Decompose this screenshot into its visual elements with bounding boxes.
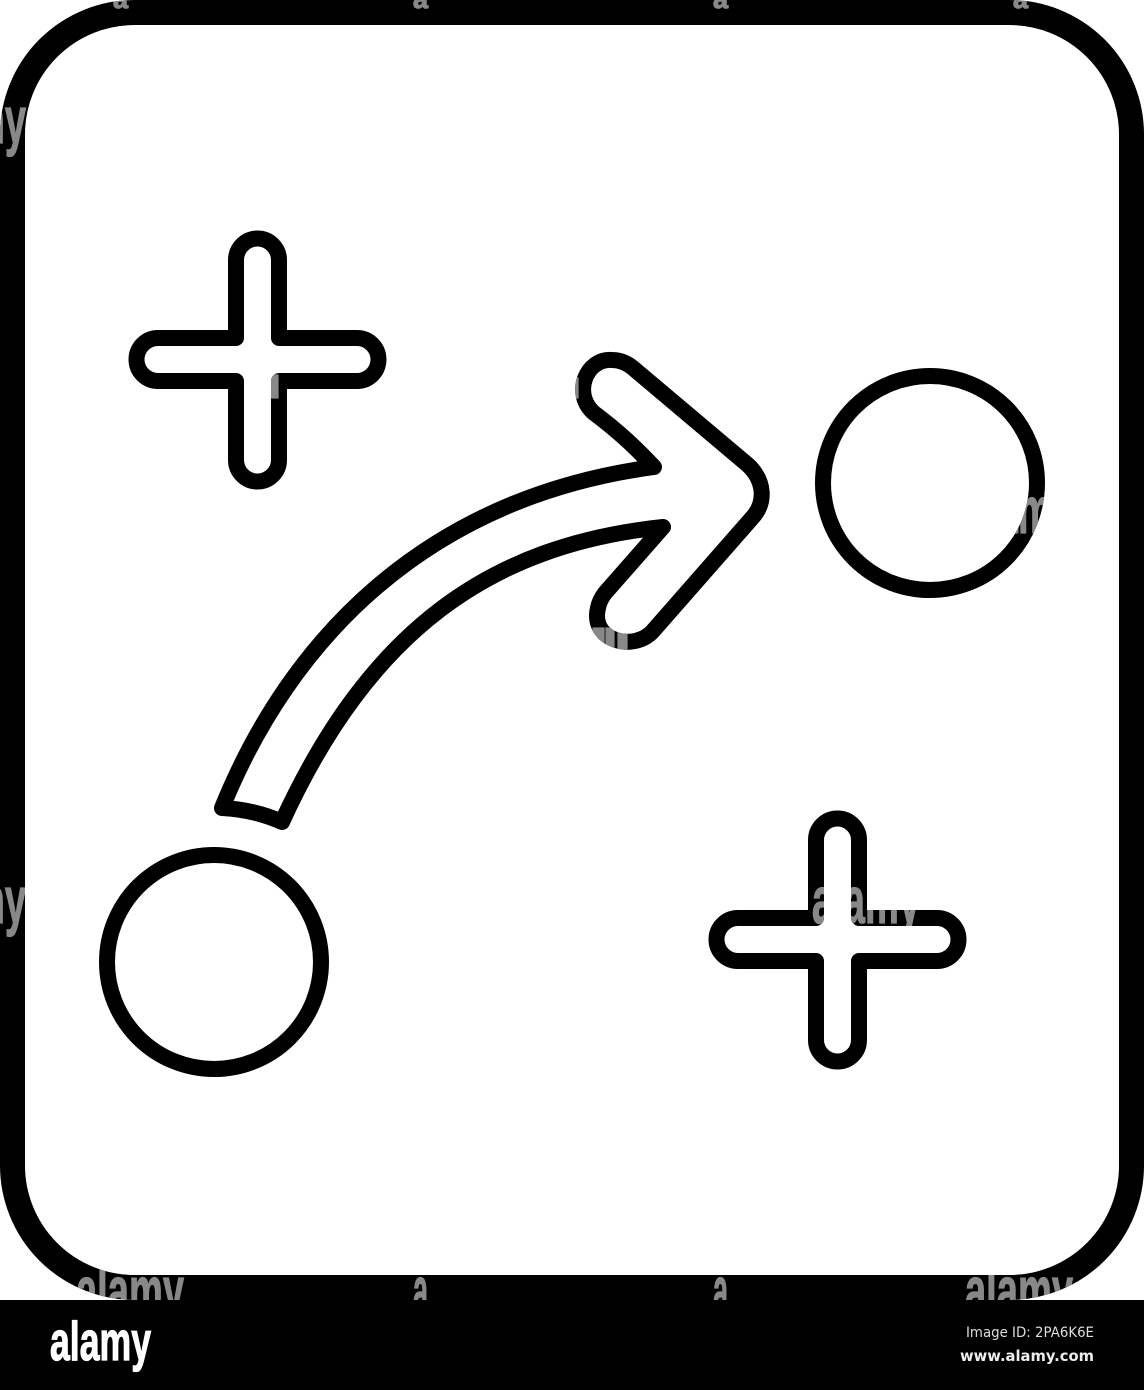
website: www.alamy.com (960, 1347, 1094, 1365)
footer bar (0, 1300, 1144, 1390)
icon: bottom-right plus marker (716, 818, 958, 1062)
watermark fragments on linework: a (713, 1253, 729, 1327)
watermark fragments on linework: alamy (812, 863, 920, 937)
icon: start circle (107, 855, 321, 1069)
image id: Image ID: 2PA6K6E (966, 1325, 1094, 1341)
footer logo: alamy (50, 1310, 151, 1372)
icon: top-left plus marker (136, 238, 378, 482)
watermark fragments on linework: alamy (76, 1253, 184, 1327)
watermark fragments on linework: a (413, 1253, 429, 1327)
arrow: curved play path (222, 360, 762, 822)
icon: target circle (823, 376, 1037, 590)
